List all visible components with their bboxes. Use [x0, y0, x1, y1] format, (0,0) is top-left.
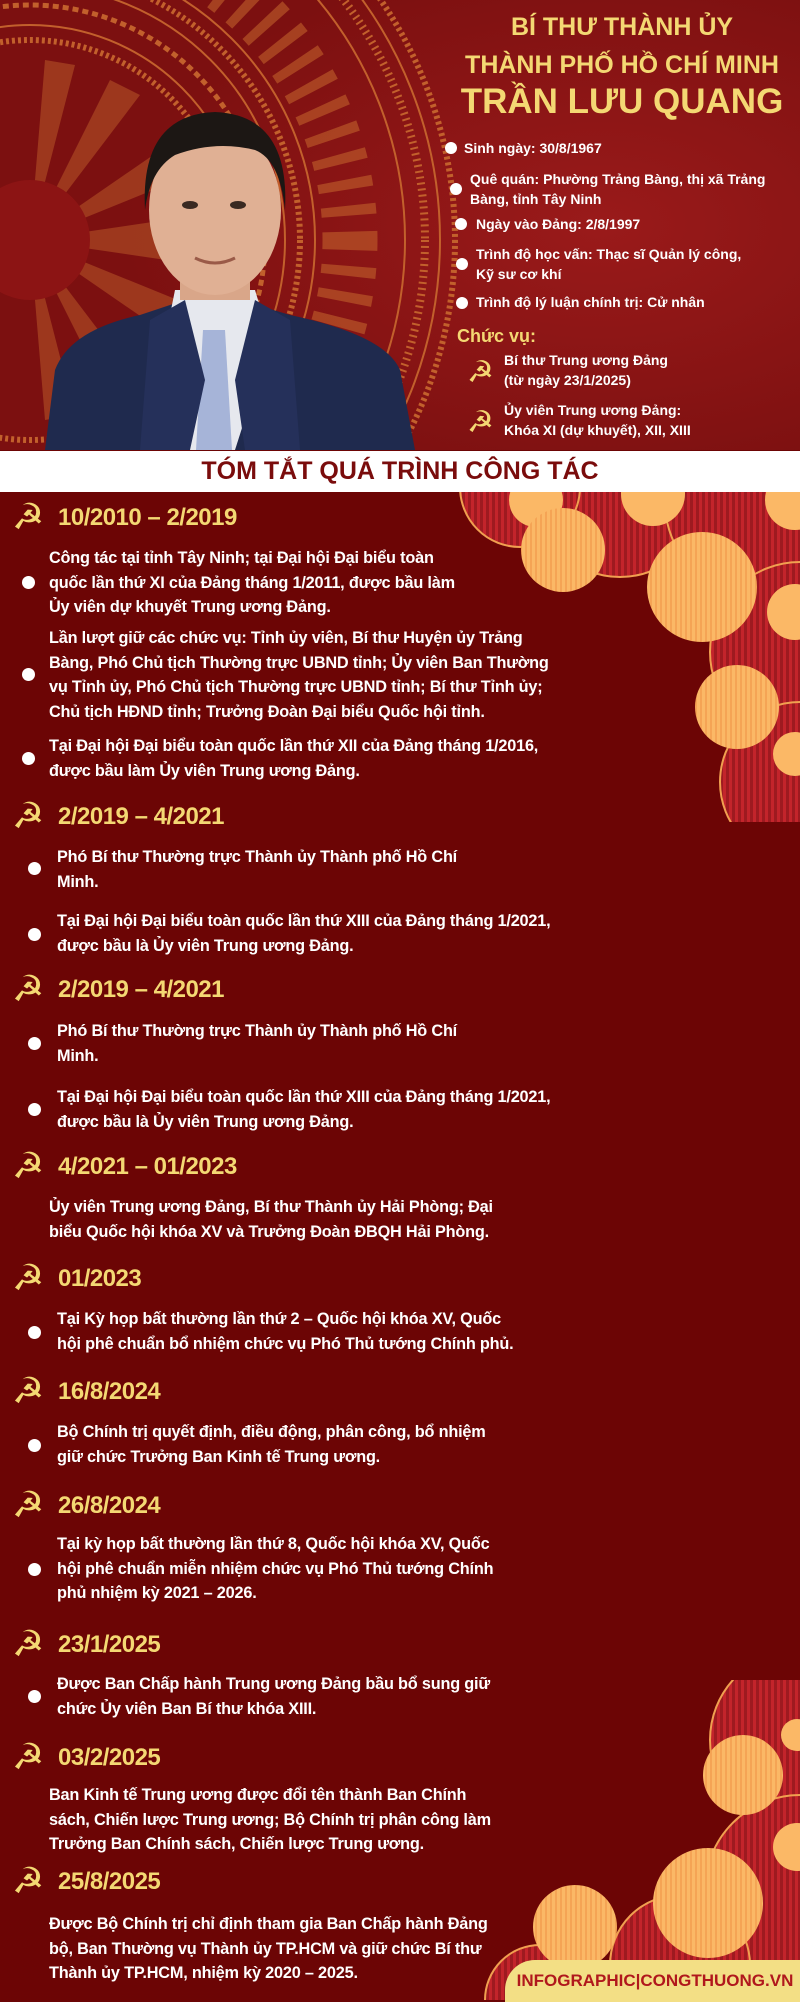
positions (Chức vụ): Chức vụ: — [457, 326, 536, 346]
section 3: 2/2019 – 4/2021 (repeat) — [12, 969, 550, 1130]
title: TRẦN LƯU QUANG — [461, 82, 783, 121]
section 5: 01/2023: hội phê chuẩn bổ nhiệm chức vụ Phó Thủ tướng Chính phủ. — [57, 1334, 513, 1352]
positions (Chức vụ): (từ ngày 23/1/2025) — [504, 372, 631, 388]
section 8: 23/1/2025: chức Ủy viên Ban Bí thư khóa XIII. — [57, 1700, 316, 1718]
section 1: 10/2010 – 2/2019 — [12, 497, 549, 780]
section 10: 25/8/2025: ☭ — [12, 1861, 44, 1902]
section 6: 16/8/2024: giữ chức Trưởng Ban Kinh tế Trung ương. — [57, 1448, 380, 1466]
section 2: 2/2019 – 4/2021: Tại Đại hội Đại biểu toàn quốc lần thứ XIII của Đảng tháng 1/2021, — [57, 912, 550, 930]
section 10: 25/8/2025: Được Bộ Chính trị chỉ định tham gia Ban Chấp hành Đảng — [49, 1915, 488, 1933]
section 7: 26/8/2024: Tại kỳ họp bất thường lần thứ 8, Quốc hội khóa XV, Quốc — [57, 1535, 489, 1553]
section 1: 10/2010 – 2/2019: ☭ — [12, 497, 44, 538]
personal info list — [445, 140, 765, 310]
personal info list: Sinh ngày: 30/8/1967 — [464, 140, 602, 156]
section 2: 2/2019 – 4/2021: 2/2019 – 4/2021 — [58, 803, 224, 830]
positions (Chức vụ): ☭ — [467, 405, 494, 440]
section 1: 10/2010 – 2/2019: Lần lượt giữ các chức vụ: Tỉnh ủy viên, Bí thư Huyện ủy Trảng — [49, 629, 523, 647]
title: THÀNH PHỐ HỒ CHÍ MINH — [465, 51, 779, 79]
section 3: 2/2019 – 4/2021 (repeat): Minh. — [57, 1046, 98, 1064]
section 2: 2/2019 – 4/2021: Minh. — [57, 872, 98, 890]
section 5: 01/2023: ☭ — [12, 1258, 44, 1299]
section 9: 03/2/2025: sách, Chiến lược Trung ương; Bộ Chính trị phân công làm — [49, 1810, 491, 1828]
section 8: 23/1/2025: ☭ — [12, 1624, 44, 1665]
positions (Chức vụ) — [457, 326, 691, 440]
section 10: 25/8/2025: Thành ủy TP.HCM, nhiệm kỳ 2020 – 2025. — [49, 1964, 358, 1982]
section 8: 23/1/2025: Được Ban Chấp hành Trung ương Đảng bầu bổ sung giữ — [57, 1675, 490, 1693]
footer credit — [505, 1960, 800, 2002]
section 9: 03/2/2025 — [12, 1737, 491, 1853]
section 9: 03/2/2025: Trưởng Ban Chính sách, Chiến lược Trung ương. — [49, 1835, 424, 1853]
section 1: 10/2010 – 2/2019: được bầu làm Ủy viên Trung ương Đảng. — [49, 762, 360, 780]
section 4: 4/2021 – 01/2023 — [12, 1146, 493, 1240]
section 3: 2/2019 – 4/2021 (repeat): được bầu là Ủy viên Trung ương Đảng. — [57, 1112, 353, 1130]
section 7: 26/8/2024: hội phê chuẩn miễn nhiệm chức vụ Phó Thủ tướng Chính — [57, 1560, 493, 1578]
section 10: 25/8/2025 — [12, 1861, 488, 1982]
section 8: 23/1/2025: 23/1/2025 — [58, 1631, 160, 1658]
footer credit: INFOGRAPHIC|CONGTHUONG.VN — [517, 1971, 793, 1990]
section 2: 2/2019 – 4/2021: Phó Bí thư Thường trực Thành ủy Thành phố Hồ Chí — [57, 848, 457, 866]
positions (Chức vụ): Ủy viên Trung ương Đảng: — [504, 402, 681, 418]
personal info list: Bàng, tỉnh Tây Ninh — [470, 191, 601, 207]
section 6: 16/8/2024: 16/8/2024 — [58, 1378, 160, 1405]
section 2: 2/2019 – 4/2021: ☭ — [12, 796, 44, 837]
section 8: 23/1/2025 — [12, 1624, 490, 1718]
section 6: 16/8/2024: Bộ Chính trị quyết định, điều động, phân công, bổ nhiệm — [57, 1423, 486, 1441]
section 3: 2/2019 – 4/2021 (repeat): 2/2019 – 4/2021 — [58, 976, 224, 1003]
banner: section title: TÓM TẮT QUÁ TRÌNH CÔNG TÁC — [201, 457, 599, 485]
portrait — [45, 112, 415, 450]
decorative fans top — [459, 492, 800, 822]
personal info list: Ngày vào Đảng: 2/8/1997 — [476, 216, 640, 232]
section 10: 25/8/2025: bộ, Ban Thường vụ Thành ủy TP.HCM và giữ chức Bí thư — [49, 1940, 481, 1958]
personal info list: Kỹ sư cơ khí — [476, 266, 561, 282]
section 9: 03/2/2025: Ban Kinh tế Trung ương được đổi tên thành Ban Chính — [49, 1786, 466, 1804]
section 1: 10/2010 – 2/2019: Ủy viên dự khuyết Trung ương Đảng. — [49, 598, 331, 616]
positions (Chức vụ): Khóa XI (dự khuyết), XII, XIII — [504, 422, 691, 438]
section 6: 16/8/2024: ☭ — [12, 1371, 44, 1412]
section 4: 4/2021 – 01/2023: 4/2021 – 01/2023 — [58, 1153, 237, 1180]
personal info list: Quê quán: Phường Trảng Bàng, thị xã Trảng — [470, 171, 765, 187]
section 10: 25/8/2025: 25/8/2025 — [58, 1868, 160, 1895]
section 7: 26/8/2024: 26/8/2024 — [58, 1492, 160, 1519]
positions (Chức vụ): Bí thư Trung ương Đảng — [504, 352, 668, 368]
section 7: 26/8/2024: ☭ — [12, 1485, 44, 1526]
section 4: 4/2021 – 01/2023: ☭ — [12, 1146, 44, 1187]
section 1: 10/2010 – 2/2019: Bàng, Phó Chủ tịch Thường trực UBND tỉnh; Ủy viên Ban Thường — [49, 654, 549, 672]
title: BÍ THƯ THÀNH ỦY — [511, 13, 733, 41]
title — [461, 12, 783, 121]
section 5: 01/2023: 01/2023 — [58, 1265, 141, 1292]
section 4: 4/2021 – 01/2023: Ủy viên Trung ương Đảng, Bí thư Thành ủy Hải Phòng; Đại — [49, 1198, 493, 1216]
section 1: 10/2010 – 2/2019: Chủ tịch HĐND tỉnh; Trưởng Đoàn Đại biểu Quốc hội tỉnh. — [49, 702, 485, 720]
section 1: 10/2010 – 2/2019: Tại Đại hội Đại biểu toàn quốc lần thứ XII của Đảng tháng 1/2016, — [49, 737, 538, 755]
section 6: 16/8/2024 — [12, 1371, 486, 1466]
section 1: 10/2010 – 2/2019: 10/2010 – 2/2019 — [58, 504, 237, 531]
section 1: 10/2010 – 2/2019: quốc lần thứ XI của Đảng tháng 1/2011, được bầu làm — [49, 574, 455, 592]
section 1: 10/2010 – 2/2019: Công tác tại tỉnh Tây Ninh; tại Đại hội Đại biểu toàn — [49, 549, 434, 567]
section 5: 01/2023 — [12, 1258, 513, 1352]
section 3: 2/2019 – 4/2021 (repeat): ☭ — [12, 969, 44, 1010]
section 2: 2/2019 – 4/2021: được bầu là Ủy viên Trung ương Đảng. — [57, 936, 353, 954]
personal info list: Trình độ học vấn: Thạc sĩ Quản lý công, — [476, 246, 741, 262]
section 4: 4/2021 – 01/2023: biểu Quốc hội khóa XV và Trưởng Đoàn ĐBQH Hải Phòng. — [49, 1222, 489, 1240]
section 2: 2/2019 – 4/2021 — [12, 796, 550, 954]
section 1: 10/2010 – 2/2019: vụ Tỉnh ủy, Phó Chủ tịch Thường trực UBND tỉnh; Bí thư Tỉnh ủy; — [49, 678, 542, 696]
positions (Chức vụ): ☭ — [467, 355, 494, 390]
section 3: 2/2019 – 4/2021 (repeat): Tại Đại hội Đại biểu toàn quốc lần thứ XIII của Đảng tháng 1/2021, — [57, 1088, 550, 1106]
section 9: 03/2/2025: ☭ — [12, 1737, 44, 1778]
section 7: 26/8/2024 — [12, 1485, 493, 1602]
decorative fans bottom — [484, 1680, 800, 2000]
banner: section title — [0, 451, 800, 492]
personal info list: Trình độ lý luận chính trị: Cử nhân — [476, 294, 705, 310]
section 9: 03/2/2025: 03/2/2025 — [58, 1744, 160, 1771]
section 5: 01/2023: Tại Kỳ họp bất thường lần thứ 2 – Quốc hội khóa XV, Quốc — [57, 1310, 501, 1328]
section 7: 26/8/2024: phủ nhiệm kỳ 2021 – 2026. — [57, 1584, 257, 1602]
section 3: 2/2019 – 4/2021 (repeat): Phó Bí thư Thường trực Thành ủy Thành phố Hồ Chí — [57, 1022, 457, 1040]
header background with drum pattern and portrait — [0, 0, 800, 450]
